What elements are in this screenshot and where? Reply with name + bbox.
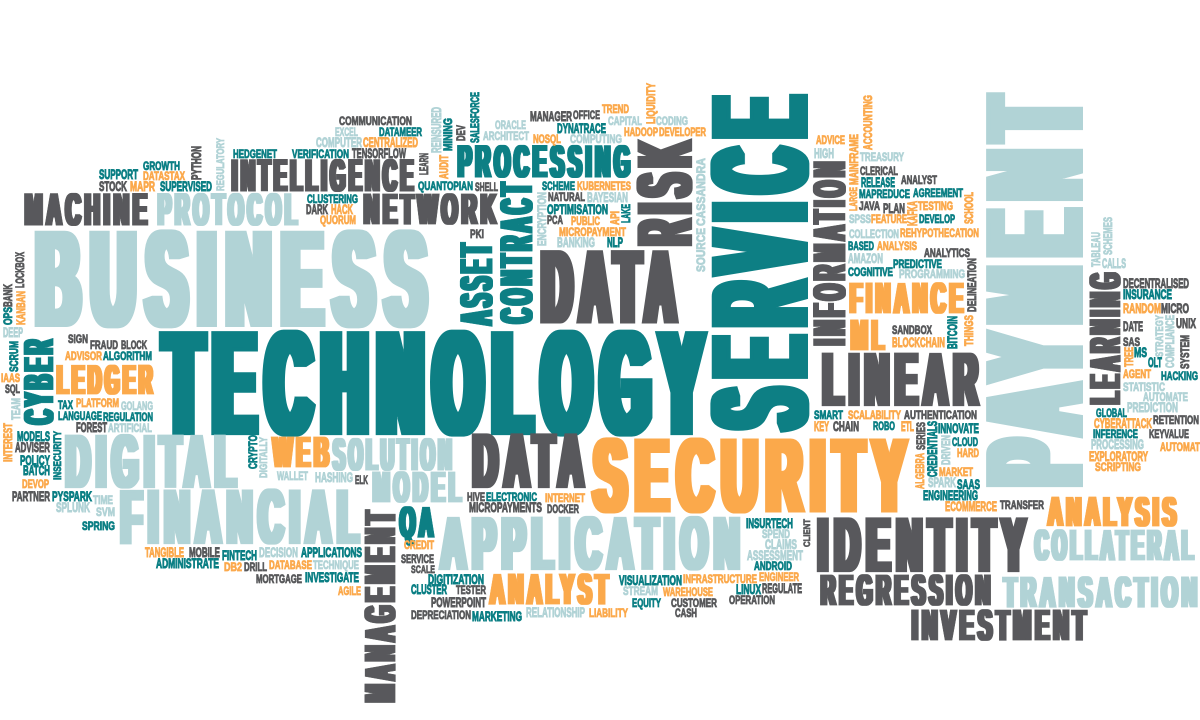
- word: KUBERNETES: KUBERNETES: [577, 179, 631, 193]
- word: OPERATION: OPERATION: [729, 593, 775, 607]
- word: HEDGENET: HEDGENET: [233, 147, 277, 161]
- word cloud: DATA: [542, 230, 684, 344]
- word: STREAM: STREAM: [623, 584, 658, 598]
- word: DARK: DARK: [306, 202, 328, 217]
- word: REGULATORY: REGULATORY: [215, 138, 227, 191]
- word: MAINFRAME: MAINFRAME: [847, 134, 861, 185]
- word: ANALYST small: ANALYST: [901, 173, 937, 187]
- word: LIQUIDITY: LIQUIDITY: [644, 83, 658, 124]
- word: DATE: DATE: [1123, 319, 1143, 334]
- word: LEARN: LEARN: [417, 153, 431, 175]
- word cloud: LEARNING: [1082, 269, 1130, 404]
- word: STOCK: STOCK: [99, 179, 127, 194]
- word: ENGINEER: ENGINEER: [759, 570, 799, 584]
- word: CASSANDRA: CASSANDRA: [694, 158, 708, 226]
- word: QUORUM: QUORUM: [320, 213, 356, 227]
- word: PROCESSING small: PROCESSING: [1091, 437, 1144, 452]
- word: CASH: CASH: [675, 606, 697, 620]
- word: SCRIPTING: SCRIPTING: [1095, 460, 1141, 474]
- word: TRANSFER: TRANSFER: [1000, 498, 1044, 512]
- word: DEEP: DEEP: [3, 325, 23, 340]
- word: CREDIT: CREDIT: [404, 538, 434, 552]
- word: ECOMMERCE: ECOMMERCE: [945, 499, 997, 514]
- word: TENSORFLOW: TENSORFLOW: [352, 146, 406, 161]
- word: STATISTIC: STATISTIC: [1123, 380, 1165, 394]
- word: POLICY: POLICY: [20, 453, 50, 468]
- word: SAAS: SAAS: [957, 477, 980, 492]
- word: SYSTEM: SYSTEM: [1178, 335, 1192, 369]
- word: SPLUNK: SPLUNK: [56, 500, 90, 515]
- word: TREND: TREND: [602, 102, 629, 116]
- word: CLUSTERING: CLUSTERING: [307, 192, 358, 206]
- word: ELECTRONIC: ELECTRONIC: [486, 490, 537, 504]
- word: OPTIMISATION: OPTIMISATION: [547, 202, 608, 217]
- word cloud: WEB: [273, 429, 333, 477]
- word: MANAGER: MANAGER: [530, 109, 572, 124]
- word: COMMUNICATION: COMMUNICATION: [339, 114, 412, 128]
- word: RANDOM: RANDOM: [1123, 301, 1161, 316]
- word: ETL: ETL: [901, 419, 914, 434]
- word: AMAZON: AMAZON: [848, 251, 883, 266]
- word: DATASTAX: DATASTAX: [143, 169, 186, 183]
- word: TECHNIQUE: TECHNIQUE: [313, 558, 359, 572]
- word: PKI: PKI: [470, 227, 484, 241]
- word: AGREEMENT: AGREEMENT: [913, 186, 963, 200]
- word: TREASURY: TREASURY: [860, 150, 904, 164]
- word: POWERPOINT: POWERPOINT: [431, 595, 486, 610]
- word: MOBILE: MOBILE: [189, 545, 220, 560]
- word: INNOVATE: INNOVATE: [938, 421, 979, 436]
- word: COLLECTION: COLLECTION: [849, 227, 899, 241]
- word: TABLEAU: TABLEAU: [1089, 232, 1103, 267]
- word: MAPREDUCE: MAPREDUCE: [859, 187, 910, 201]
- word: CLUSTER: CLUSTER: [411, 582, 447, 597]
- word: SHELL: SHELL: [475, 180, 498, 194]
- word: BITCOIN: BITCOIN: [945, 316, 960, 349]
- word: ROBO: ROBO: [873, 419, 895, 433]
- word: TREE: TREE: [1122, 347, 1136, 367]
- word cloud: RISK: [623, 135, 708, 245]
- word: SPSS: SPSS: [849, 212, 871, 226]
- word: PARTNER: PARTNER: [12, 489, 50, 504]
- word: SAS: SAS: [1123, 335, 1140, 349]
- word: DATABASE: DATABASE: [269, 558, 312, 572]
- word: SOURCE: SOURCE: [694, 228, 708, 272]
- word: SIGN: SIGN: [68, 332, 88, 346]
- word: EXPLORATORY: EXPLORATORY: [1089, 449, 1148, 464]
- word: PLAN: PLAN: [883, 201, 905, 216]
- word: FOREST: FOREST: [76, 420, 107, 435]
- word cloud: DIGITAL: [66, 420, 242, 503]
- word: INFRASTRUCTURE: INFRASTRUCTURE: [683, 572, 757, 586]
- word: SPARK: SPARK: [928, 475, 956, 490]
- word cloud: DATA: [473, 419, 590, 504]
- word: SCHOOL: SCHOOL: [962, 192, 976, 224]
- word: INFERENCE: INFERENCE: [1093, 427, 1138, 441]
- word: DEVELOPER: DEVELOPER: [659, 125, 706, 139]
- word: NLP: NLP: [607, 235, 623, 250]
- word: PYSPARK: PYSPARK: [52, 489, 92, 504]
- word: DEV: DEV: [454, 125, 468, 141]
- word: REGULATE: REGULATE: [762, 581, 802, 596]
- word: WAREHOUSE: WAREHOUSE: [663, 585, 713, 599]
- word: HASHING: HASHING: [315, 470, 353, 485]
- word: DEVELOP: DEVELOP: [919, 212, 955, 226]
- word: CUSTOMER: CUSTOMER: [671, 596, 717, 610]
- word cloud: ML: [851, 312, 888, 360]
- word: NOSQL: NOSQL: [533, 132, 561, 146]
- word: SERIES: SERIES: [914, 422, 928, 450]
- word: INVESTIGATE: INVESTIGATE: [305, 570, 359, 585]
- word: INTERNET: INTERNET: [545, 491, 585, 505]
- word: QUANTOPIAN: QUANTOPIAN: [418, 179, 473, 193]
- word: GOLANG: GOLANG: [121, 399, 153, 413]
- word cloud: MODEL: [373, 464, 465, 512]
- word: SPEND: SPEND: [762, 527, 790, 541]
- word: ELK: ELK: [355, 473, 368, 487]
- word cloud: FINANCE: [850, 275, 967, 323]
- word: KAFKA: KAFKA: [905, 201, 920, 226]
- word cloud: BUSINESS: [36, 205, 438, 354]
- word: VISUALIZATION: VISUALIZATION: [619, 573, 682, 588]
- word: MINING: MINING: [441, 118, 455, 151]
- word: CRYPTO: CRYPTO: [246, 435, 260, 469]
- word: TESTER: TESTER: [456, 583, 486, 597]
- word: DRILL: DRILL: [244, 560, 267, 574]
- word: INSURTECH: INSURTECH: [746, 516, 793, 531]
- word: TAX: TAX: [58, 398, 74, 412]
- word: ALGEBRA: ALGEBRA: [913, 453, 927, 489]
- word cloud: APPLICATION: [441, 502, 746, 585]
- word: COGNITIVE: COGNITIVE: [848, 265, 893, 279]
- word: BLOCKCHAIN: BLOCKCHAIN: [892, 335, 945, 350]
- word cloud: QA: [400, 499, 437, 547]
- word: ENGINEERING: ENGINEERING: [923, 488, 978, 503]
- word: ARTIFICIAL: ARTIFICIAL: [108, 421, 152, 435]
- word: TANGIBLE: TANGIBLE: [145, 545, 184, 560]
- word: DRIVEN: DRIVEN: [939, 435, 953, 465]
- word: ANDROID: ANDROID: [754, 559, 792, 573]
- word: MAPR: MAPR: [130, 179, 155, 194]
- word: CAPITAL: CAPITAL: [608, 114, 642, 128]
- word: CALLS: CALLS: [1102, 256, 1126, 271]
- word: TESTING: TESTING: [918, 199, 953, 213]
- word: OLT: OLT: [1148, 355, 1162, 370]
- word cloud: CYBER: [15, 336, 62, 424]
- word: SUPERVISED: SUPERVISED: [160, 179, 212, 194]
- word cloud: MANAGEMENT: [357, 507, 405, 702]
- word: RELEASE: RELEASE: [861, 175, 895, 190]
- word: AUTHENTICATION: AUTHENTICATION: [904, 408, 977, 422]
- word: SUPPORT: SUPPORT: [99, 167, 138, 182]
- word: MS: MS: [1134, 345, 1147, 360]
- word cloud: FINANCIAL: [121, 475, 365, 560]
- word: DEPRECIATION: DEPRECIATION: [411, 608, 471, 622]
- word: CLOUD: CLOUD: [952, 435, 978, 449]
- word: PROGRAMMING: PROGRAMMING: [899, 267, 965, 281]
- word: COMPUTING: COMPUTING: [570, 132, 622, 146]
- word: CLERICAL: CLERICAL: [860, 164, 898, 178]
- word: CREDENTIALS: CREDENTIALS: [925, 421, 940, 477]
- word: SCHEMES: SCHEMES: [1101, 217, 1115, 255]
- word: MARKETING: MARKETING: [472, 609, 522, 624]
- word: REHYPOTHECATION: REHYPOTHECATION: [900, 226, 979, 240]
- word: AGILE: AGILE: [338, 584, 361, 598]
- word: PYTHON: PYTHON: [189, 146, 204, 180]
- word cloud: REGRESSION: [821, 567, 994, 615]
- word: ENCRYPTION: ENCRYPTION: [535, 192, 549, 246]
- word: CYBERATTACK: CYBERATTACK: [1094, 416, 1152, 431]
- word: DECISION: DECISION: [259, 545, 298, 560]
- word: CHAIN: CHAIN: [833, 419, 859, 434]
- word: ACCOUNTING: ACCOUNTING: [861, 95, 875, 150]
- word: HACK: HACK: [331, 202, 353, 217]
- word cloud: ASSET: [451, 240, 502, 325]
- word: AGENT: AGENT: [1123, 367, 1151, 381]
- word: ADVISOR: ADVISOR: [65, 349, 102, 363]
- word: DIGITIZATION: DIGITIZATION: [428, 572, 484, 587]
- word: DYNATRACE: DYNATRACE: [557, 121, 606, 136]
- word: PCA: PCA: [547, 213, 563, 227]
- word: INSECURITY: INSECURITY: [52, 431, 64, 480]
- word: ASSESSMENT: ASSESSMENT: [747, 548, 803, 563]
- word: SPRING: SPRING: [82, 519, 115, 533]
- word: EXCEL: EXCEL: [335, 125, 358, 139]
- word: SALESFORCE: SALESFORCE: [468, 92, 482, 143]
- word: API: API: [608, 211, 622, 225]
- word: DELINEATION: DELINEATION: [965, 258, 979, 312]
- word: TEAM: TEAM: [9, 398, 23, 420]
- word: TIME: TIME: [93, 493, 113, 507]
- word: PREDICTIVE: PREDICTIVE: [893, 257, 942, 271]
- word: INTEREST: INTEREST: [1, 423, 15, 462]
- word: ADMINISTRATE: ADMINISTRATE: [156, 556, 219, 571]
- word: ANALYSIS small: ANALYSIS: [877, 239, 917, 253]
- word: IAAS: IAAS: [1, 371, 20, 385]
- word: BANKING: BANKING: [557, 235, 595, 250]
- word: REINSURED: REINSURED: [429, 107, 444, 153]
- word: AUDIT: AUDIT: [437, 155, 451, 179]
- word cloud: PROTOCOL: [158, 184, 301, 235]
- word: RELATIONSHIP: RELATIONSHIP: [526, 605, 585, 620]
- word cloud: ANALYST: [490, 566, 612, 614]
- word: DIGITALLY: DIGITALLY: [258, 437, 270, 478]
- word cloud: NETWORK: [364, 186, 500, 234]
- word: LINUX: LINUX: [736, 582, 762, 597]
- word: LIABILITY: LIABILITY: [589, 606, 628, 620]
- word: PUBLIC: PUBLIC: [571, 214, 600, 228]
- word: MICROPAYMENT: MICROPAYMENT: [559, 225, 626, 239]
- word: GLOBAL: GLOBAL: [1096, 406, 1127, 420]
- word: ANALYTICS: ANALYTICS: [924, 246, 970, 260]
- word: BATCH: BATCH: [23, 463, 50, 478]
- word: WALLET: WALLET: [277, 469, 308, 483]
- word: ADVISER: ADVISER: [15, 440, 50, 455]
- word: FRAUD: FRAUD: [90, 338, 118, 352]
- word cloud: SOLUTION: [333, 429, 455, 480]
- word: DEVOP: DEVOP: [22, 477, 49, 491]
- word: SANDBOX: SANDBOX: [892, 323, 933, 337]
- word: LOCKBOX: LOCKBOX: [13, 252, 27, 288]
- word: CLAIMS: CLAIMS: [765, 537, 797, 552]
- word: BANK: BANK: [1, 284, 15, 307]
- word: LAKE: LAKE: [619, 204, 633, 223]
- word: MORTGAGE: MORTGAGE: [256, 572, 302, 586]
- word: SERVICE small: SERVICE: [401, 552, 434, 566]
- word: HADOOP: HADOOP: [624, 125, 658, 139]
- word: ORACLE: ORACLE: [495, 118, 526, 132]
- word: OFFICE: OFFICE: [573, 108, 600, 122]
- word cloud: LEDGER: [57, 356, 156, 403]
- word: DB2: DB2: [224, 560, 242, 574]
- word: OPS: OPS: [1, 307, 15, 325]
- word: HARD: HARD: [957, 446, 979, 460]
- word: HIVE: HIVE: [467, 490, 485, 504]
- word: FEATURE: FEATURE: [871, 212, 907, 226]
- word: SQL: SQL: [5, 382, 20, 396]
- word: HIGH: HIGH: [814, 146, 834, 161]
- word cloud: INTELLIGENCE: [232, 150, 417, 201]
- word: KANBAN: KANBAN: [14, 291, 28, 325]
- word: BASED: BASED: [848, 239, 874, 253]
- word: STRATEGY: STRATEGY: [1154, 315, 1166, 357]
- word: SMART: SMART: [814, 408, 843, 422]
- word: ADVICE: ADVICE: [816, 133, 845, 147]
- word: ALGORITHM: ALGORITHM: [103, 349, 152, 363]
- word: BLOCK: BLOCK: [121, 338, 147, 352]
- word: LANGUAGE: LANGUAGE: [58, 409, 102, 423]
- word: GROWTH: GROWTH: [143, 159, 180, 173]
- word cloud: CONTRACT: [491, 179, 542, 323]
- word: CENTRALIZED: CENTRALIZED: [363, 135, 418, 150]
- word: SVM: SVM: [96, 505, 115, 519]
- word: COMPLIANCE: COMPLIANCE: [1163, 315, 1177, 368]
- word: ARCHITECT: ARCHITECT: [483, 129, 529, 143]
- word: NATURAL: NATURAL: [548, 190, 585, 204]
- word: SCHEME: SCHEME: [542, 179, 575, 193]
- word: REGULATION: REGULATION: [103, 410, 153, 424]
- word: KEY: KEY: [814, 419, 829, 434]
- word: MARKET: MARKET: [939, 465, 973, 479]
- word: EQUITY: EQUITY: [632, 596, 661, 610]
- word: APPLICATIONS: APPLICATIONS: [301, 545, 362, 560]
- word cloud: LINEAR: [823, 338, 984, 421]
- word: SCALABILITY: SCALABILITY: [848, 408, 901, 422]
- word: DOCKER: DOCKER: [547, 502, 579, 516]
- word: PLATFORM: PLATFORM: [76, 396, 119, 410]
- word cloud: MACHINE: [25, 184, 151, 235]
- word: BAYESIAN: BAYESIAN: [587, 190, 628, 205]
- word: THINGS: THINGS: [962, 315, 976, 346]
- word: FINTECH: FINTECH: [222, 548, 257, 563]
- word: DATAMEER: DATAMEER: [379, 125, 422, 139]
- word: CODING: CODING: [656, 114, 688, 128]
- word: SCALE: SCALE: [411, 564, 435, 576]
- word cloud: PROCESSING: [458, 136, 634, 187]
- word: SCRUM: SCRUM: [7, 341, 21, 372]
- word: COMPUTER: COMPUTER: [316, 135, 362, 150]
- word: JAVA: JAVA: [859, 199, 880, 213]
- word: VERIFICATION: VERIFICATION: [292, 147, 349, 161]
- word: MODELS: MODELS: [17, 429, 50, 444]
- word: MICROPAYMENTS: MICROPAYMENTS: [469, 500, 542, 515]
- word: CLIENT: CLIENT: [802, 519, 813, 547]
- word: LARGE: LARGE: [848, 187, 860, 211]
